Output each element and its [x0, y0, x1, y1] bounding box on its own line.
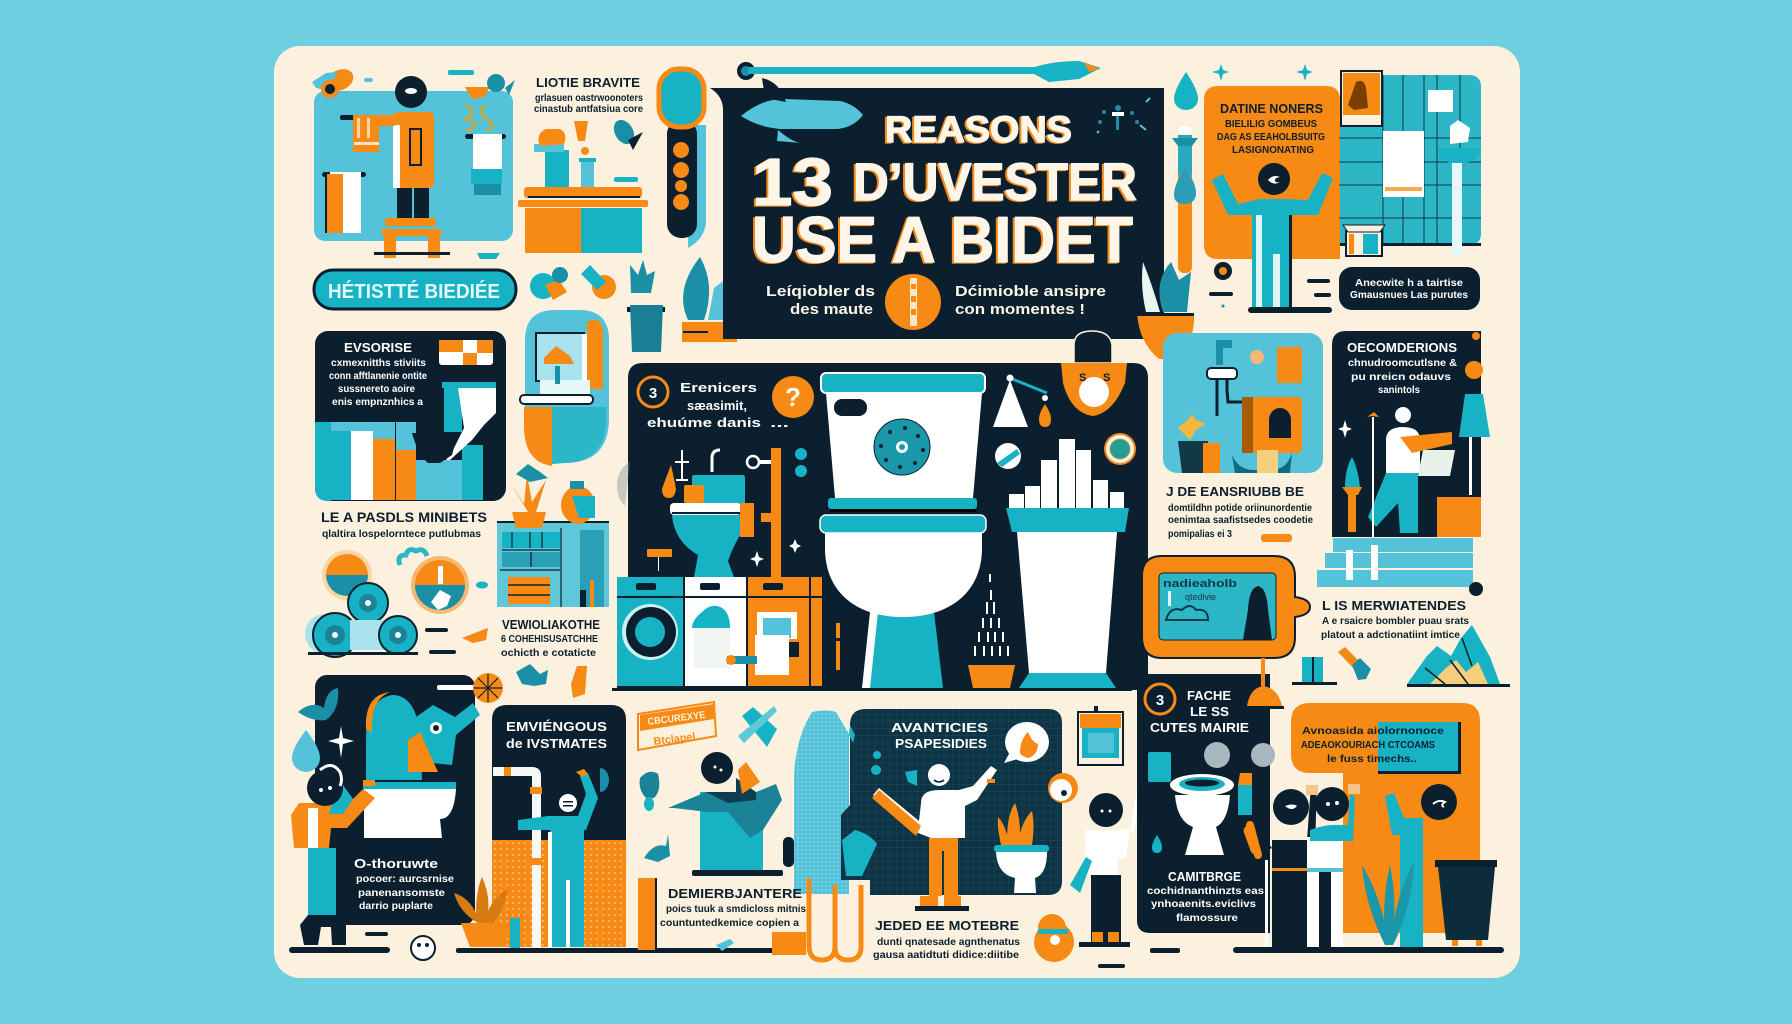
- speech bubble: [1004, 722, 1049, 763]
- icons: small rolls: [530, 265, 616, 300]
- panel text: BIELILIG GOMBEUS: [1225, 119, 1317, 130]
- panel: central toilet: [612, 363, 1148, 691]
- text: PSAPESIDIES: [895, 736, 987, 751]
- mop plant: [1342, 457, 1362, 532]
- text block: Demierbjantere: poics tuuk a smdicloss mitnis: [666, 904, 806, 915]
- right towel: [465, 134, 506, 195]
- counter with sink: [518, 121, 648, 253]
- left towel: [322, 172, 366, 233]
- title text: USE A BIDET: [752, 203, 1133, 276]
- panel: top-left towel scene: [312, 65, 515, 258]
- hanging towel: [1383, 131, 1424, 197]
- heading: CUTES MAIRIE: [1150, 720, 1249, 735]
- teal plant: [1362, 862, 1414, 945]
- toilet: [1170, 774, 1234, 855]
- text: [1347, 340, 1457, 396]
- jar on shelf: [561, 481, 595, 524]
- text: le fuss timechs..: [1327, 754, 1417, 765]
- toilet icon: [412, 382, 496, 463]
- mini plant: [975, 574, 1008, 656]
- small orange marks: [836, 623, 840, 670]
- crystal rocks: [1407, 625, 1510, 687]
- pot beside title: [1137, 262, 1194, 359]
- teal person: [518, 769, 598, 947]
- text: chnudroomcutlsne &: [1348, 358, 1457, 369]
- person with towel: [340, 76, 450, 258]
- person cleaning: [1368, 407, 1455, 533]
- text block: Vewioliakothe: [501, 617, 600, 659]
- subtitle text: Dćimioble ansipre: [955, 283, 1106, 300]
- circle icon: [1048, 773, 1078, 803]
- shelf unit with plant: [497, 464, 609, 607]
- text block: Merwiatendes: A e rsaicre bombler puau srats: [1322, 616, 1469, 627]
- text block: Demierbjantere: countuntedkemice copien a: [660, 918, 799, 929]
- icon: teal cross: [738, 706, 777, 747]
- panel: Emviengous: [492, 705, 626, 947]
- panel: orange person: [1204, 86, 1340, 313]
- paper stack vase: [1006, 439, 1129, 688]
- machine: [1242, 397, 1302, 453]
- orange shirt person: [291, 765, 375, 945]
- small dish: [477, 253, 500, 259]
- number badge: 3: [1156, 692, 1164, 709]
- text: cxmexnitths stiviits: [331, 358, 426, 369]
- subtitle text: Leíqiobler ds: [766, 283, 875, 300]
- text: panenansomste: [358, 888, 445, 899]
- baselines: [289, 947, 774, 953]
- badge: stamp: CBCUREXYE: [647, 710, 706, 728]
- text: [647, 380, 789, 430]
- icon: remote: [659, 69, 706, 248]
- icon: floating soap: [312, 65, 474, 98]
- text block: De Eansriubb: [1166, 484, 1313, 540]
- text: [1301, 726, 1445, 765]
- panel: title: [710, 78, 1164, 339]
- panel text: LASIGNONATING: [1232, 145, 1314, 156]
- third person: [1385, 784, 1457, 947]
- lamp: [1459, 332, 1490, 495]
- text block: Merwiatendes: platout a adctionatiint imtice: [1321, 630, 1460, 641]
- text: [891, 720, 988, 751]
- title text: REASONS: [885, 109, 1072, 150]
- number badge: [1145, 684, 1175, 714]
- small flame badge: [1469, 582, 1483, 596]
- text: flamossure: [1176, 913, 1239, 924]
- framed picture: [1341, 71, 1382, 126]
- person celebrating: [872, 764, 997, 911]
- dark pill note: [1339, 267, 1480, 310]
- text: cochidnanthinzts eas: [1147, 886, 1265, 897]
- text: ynhoaenits.eviclivs: [1151, 899, 1256, 910]
- text: [329, 340, 427, 408]
- text: ADEAOKOURIACH CTCOAMS: [1301, 740, 1435, 751]
- text: enis empnznhics a: [332, 397, 423, 408]
- pin icon: [783, 837, 794, 867]
- subtitle text: [766, 283, 1106, 318]
- perforated dial: [874, 419, 930, 475]
- tiled bathroom wall: [1339, 71, 1481, 256]
- text block: Merwiatendes: [1321, 598, 1469, 641]
- text block: Jeded: dunti qnatesade agnthenatus: [877, 937, 1020, 948]
- text block: De Eansriubb: oenimtaa saafistsedes coodetie: [1168, 515, 1313, 526]
- orange crate and mop: [716, 932, 806, 955]
- text block: Vewioliakothe: VEWIOLIAKOTHE: [502, 617, 600, 632]
- icon: bird right: [610, 116, 643, 150]
- dark pill note: Gmausnues Las purutes: [1350, 290, 1468, 301]
- orange post: [638, 878, 657, 950]
- badge: stamp: Btclapel: [653, 731, 696, 748]
- title text: [752, 109, 1137, 276]
- person with box: [668, 752, 783, 876]
- text: darrio puplarte: [359, 901, 433, 912]
- text: AVANTICIES: [891, 720, 988, 735]
- text: CAMITBRGE: [1168, 869, 1241, 884]
- shell icon: [640, 772, 659, 811]
- panel: bottom-left toilet person: [315, 673, 503, 925]
- icon: drop: [1174, 72, 1198, 110]
- panel: Avantages: [841, 709, 1062, 911]
- stairs: [1317, 538, 1473, 587]
- orange device: nadieaholb: [1163, 578, 1237, 590]
- number badge: [638, 377, 668, 407]
- hanging lamp: [993, 374, 1051, 427]
- baseline right: [1098, 947, 1504, 968]
- heading: FACHE: [1187, 688, 1231, 703]
- text: de IVSTMATES: [506, 736, 607, 751]
- heading: LE SS: [1190, 704, 1229, 719]
- text: Erenicers: [680, 380, 757, 395]
- panel text: DATINE NONERS: [1220, 101, 1323, 116]
- rolls: [305, 583, 418, 657]
- icons: small objects: [516, 664, 587, 698]
- text block: Jeded: gausa aatidtuti didice:diitibe: [873, 950, 1019, 961]
- panel: Oecomderions: [1332, 331, 1490, 577]
- storage box: [1343, 225, 1385, 256]
- hanging lock: S: [1103, 372, 1110, 384]
- panel: blue machine: [1163, 333, 1323, 473]
- text: ...: [770, 415, 789, 430]
- bars: [315, 422, 483, 501]
- text: conn afftlanenie ontite: [329, 371, 427, 382]
- text block: top note: LIOTIE BRAVITE: [536, 75, 640, 90]
- text block: top note: [534, 75, 643, 115]
- question badge: ?: [785, 382, 801, 412]
- icons: tube and brush: [1292, 647, 1371, 685]
- text block: Merwiatendes: L IS MERWIATENDES: [1322, 598, 1466, 613]
- text: pu nreicn odauvs: [1351, 372, 1452, 383]
- person arms up: [1212, 163, 1333, 313]
- panel text: DAG AS EEAHOLBSUITG: [1217, 132, 1325, 143]
- pill label: [314, 270, 516, 309]
- small bathroom scene: [647, 448, 807, 578]
- framed sign: [1078, 706, 1123, 765]
- text block: De Eansriubb: domtildhn potide oriinunordentie: [1168, 503, 1312, 514]
- text block: Jeded: JEDED EE MOTEBRE: [875, 918, 1019, 933]
- gauge left: [322, 550, 372, 600]
- orange fruit icon: [1034, 914, 1074, 962]
- subtitle text: con momentes !: [955, 301, 1085, 318]
- text: EMVIÉNGOUS: [506, 719, 607, 734]
- checker icon: [439, 340, 493, 365]
- text block: De Eansriubb: pomipalias ei 3: [1168, 529, 1232, 540]
- text block: Vewioliakothe: ochicth e cotaticte: [501, 648, 596, 659]
- orange spoked wheel: [473, 673, 503, 703]
- hanging robe with tubes: [794, 710, 861, 960]
- text: OECOMDERIONS: [1347, 340, 1457, 355]
- icon: orange badge: [885, 274, 941, 330]
- text block: Jeded: [873, 918, 1020, 961]
- standing person: [1070, 783, 1142, 947]
- text block: Lea Pasdls: [321, 509, 487, 540]
- text: [506, 719, 607, 751]
- text: [1147, 869, 1265, 924]
- main toilet: [820, 373, 986, 688]
- text: [354, 856, 454, 912]
- gauge right: [399, 550, 469, 614]
- toilet: [363, 692, 456, 838]
- icon: rocket nozzle: [741, 78, 863, 143]
- text block: top note: grlasuen oastrwoonoters: [535, 93, 643, 104]
- text: pocoer: aurcsrnise: [356, 874, 454, 885]
- panel: orange group: [1291, 703, 1480, 947]
- wall mirror capsule: [520, 310, 609, 466]
- plant on shelf: [510, 464, 548, 528]
- text block: De Eansriubb: J DE EANSRIUBB BE: [1166, 484, 1304, 499]
- gear: [1104, 433, 1136, 465]
- smiley: [411, 936, 435, 960]
- icon: blue leaf bird: [298, 688, 338, 720]
- hanging lock: S: [1079, 372, 1086, 384]
- hand spray hose: [737, 61, 1101, 82]
- pill label: HÉTISTTÉ BIEDIÉE: [328, 280, 500, 303]
- text block: Demierbjantere: [660, 886, 806, 929]
- number badge: 3: [649, 385, 657, 402]
- question badge: [772, 376, 814, 418]
- pedestal sink: [1437, 120, 1481, 256]
- text: sæasimit,: [687, 398, 747, 413]
- heading: [1150, 688, 1249, 735]
- dark pill note: Anecwite h a tairtise: [1355, 278, 1463, 289]
- text: EVSORISE: [344, 340, 412, 355]
- title text: D’UVESTER: [853, 153, 1137, 212]
- panel: Evsorise: [315, 331, 506, 501]
- icon: brush stick: [1172, 126, 1233, 308]
- icon: spark burst: [1097, 98, 1150, 133]
- hanging lock: [1061, 331, 1127, 416]
- small bird: [644, 834, 670, 862]
- figure with card: [405, 703, 480, 772]
- text block: Lea Pasdls: qlaltira lospelorntece putlubmas: [322, 529, 481, 540]
- icon: bird: [465, 74, 515, 131]
- cream card: [274, 46, 1520, 978]
- rolls and gears group: [305, 550, 488, 657]
- panel: Fache: [1137, 674, 1275, 933]
- badge: stamp: [638, 702, 716, 750]
- mini pot: [968, 665, 1015, 688]
- text: Avnoasida aiolornonoce: [1302, 726, 1445, 737]
- plant in orange pot: [454, 877, 520, 948]
- striped ball: [995, 443, 1021, 469]
- title text: 13: [752, 145, 833, 220]
- plant pots: [627, 257, 737, 352]
- text: ehuúme danis: [647, 415, 761, 430]
- text block: Lea Pasdls: LE A PASDLS MINIBETS: [321, 509, 487, 525]
- text: O-thoruwte: [354, 856, 438, 871]
- appliances row: [617, 577, 822, 687]
- text block: Demierbjantere: DEMIERBJANTERE: [668, 886, 802, 901]
- orange pot: [1437, 497, 1481, 537]
- sparkle: [328, 726, 354, 758]
- hanging lamp over panel: [1247, 658, 1284, 709]
- towel dispenser: [1428, 90, 1453, 112]
- pipe: [493, 767, 542, 947]
- text: sanintols: [1378, 385, 1420, 396]
- sparkles: [1212, 64, 1313, 81]
- plant toilet: [994, 803, 1049, 893]
- text: sussnereto aoire: [338, 384, 415, 395]
- icon: large drop: [292, 730, 320, 772]
- panel text: [1217, 101, 1325, 156]
- orange device: [1142, 556, 1310, 686]
- two people: [1250, 784, 1360, 948]
- trash bin: [1435, 860, 1497, 946]
- potted flower: [1178, 414, 1220, 473]
- text block: top note: cinastub antfatsiua core: [534, 104, 643, 115]
- orange device: qtedivie: [1185, 592, 1216, 602]
- subtitle text: des maute: [790, 301, 873, 318]
- text block: Vewioliakothe: 6 COHEHISUSATCHHE: [501, 634, 598, 645]
- teal callout: [1378, 722, 1461, 774]
